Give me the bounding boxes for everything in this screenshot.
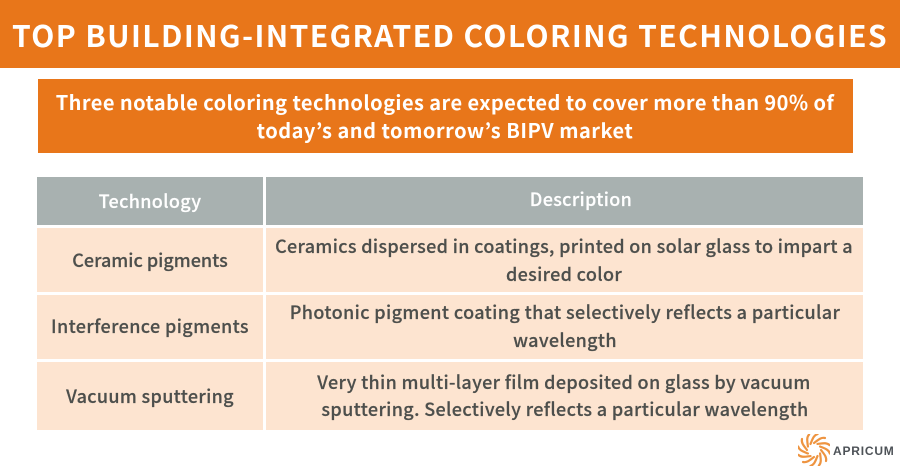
interference pigments label: Interference pigments [51, 313, 249, 339]
logo wordmark: APRICUM [833, 444, 895, 458]
row: ceramic pigments description [266, 228, 863, 292]
ceramic description line 2: desired color [506, 261, 622, 287]
subtitle line 2: today’s and tomorrow’s BIPV market [257, 115, 633, 144]
title: TOP BUILDING-INTEGRATED COLORING TECHNOLOGIES [12, 12, 888, 56]
icon: sun swirl [798, 434, 830, 466]
header cell: technology [37, 177, 263, 225]
subtitle callout [38, 79, 853, 153]
header label: technology: Technology [99, 188, 201, 214]
vacuum description line 1: Very thin multi-layer film deposited on glass by vacuum [317, 369, 811, 395]
interference description line 2: wavelength [513, 327, 617, 353]
subtitle line 1: Three notable coloring technologies are expected to cover more than 90% of [56, 87, 834, 116]
vacuum description line 2: sputtering. Selectively reflects a particular wavelength [321, 396, 809, 422]
logo: Apricum [798, 434, 895, 466]
table [37, 177, 863, 430]
header label: description: Description [530, 186, 632, 212]
vacuum sputtering label: Vacuum sputtering [66, 383, 234, 409]
row: interference pigments name [37, 295, 263, 359]
header cell: description [266, 177, 863, 225]
interference description line 1: Photonic pigment coating that selectively reflects a particular [290, 299, 840, 325]
row: vacuum sputtering name [37, 362, 263, 430]
row: ceramic pigments name [37, 228, 263, 292]
row: interference pigments description [266, 295, 863, 359]
ceramic pigments label: Ceramic pigments [72, 247, 228, 273]
ceramic description line 1: Ceramics dispersed in coatings, printed on solar glass to impart a [275, 233, 853, 259]
title banner [0, 0, 900, 68]
row: vacuum sputtering description [266, 362, 863, 430]
